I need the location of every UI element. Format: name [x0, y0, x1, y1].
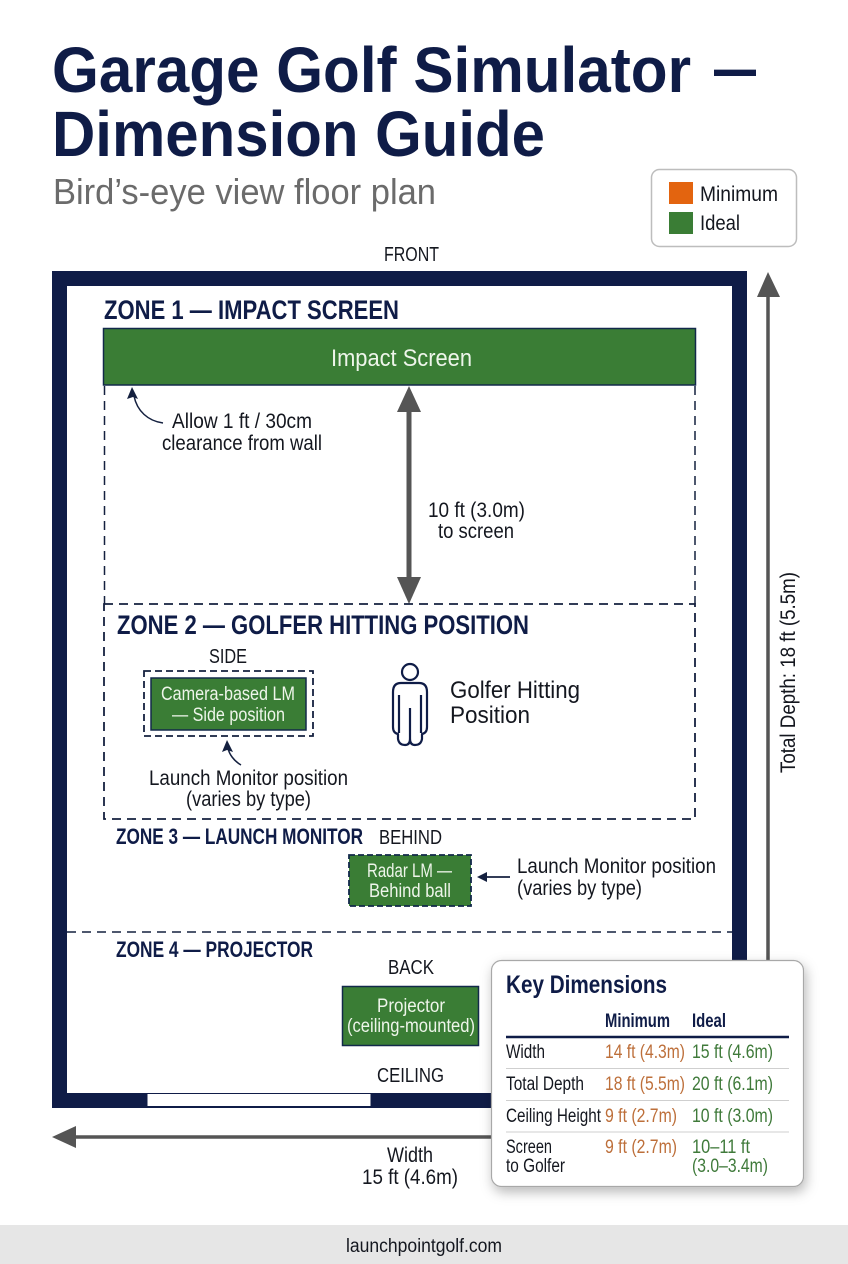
callout: wall clearance [162, 410, 322, 455]
label: behind: BEHIND [379, 827, 442, 849]
row: ceiling height: 10 ft (3.0m) [692, 1106, 773, 1127]
radar launch monitor box: Radar LM — [367, 861, 452, 882]
garage door opening [148, 1094, 370, 1106]
row: total depth: Total Depth [506, 1074, 584, 1095]
legend [652, 170, 796, 246]
callout arrow: wall clearance [127, 387, 163, 423]
title [52, 32, 756, 170]
label: front: FRONT [384, 244, 439, 266]
title: Dimension Guide [52, 98, 545, 170]
arrow: distance to screen [397, 386, 421, 604]
zone 4 heading: ZONE 4 — PROJECTOR [116, 937, 313, 962]
legend label: ideal: Ideal [700, 212, 740, 235]
projector box: Projector [377, 996, 446, 1017]
callout arrow: side position [222, 740, 241, 765]
callout: behind launch monitor position [517, 855, 716, 900]
zone 1 dashed boundary [104, 386, 695, 604]
zone 2 boundary [104, 604, 695, 819]
label: distance to screen [428, 499, 525, 543]
label: golfer hitting position [450, 677, 580, 729]
legend swatch: ideal [669, 212, 693, 234]
label: width: Width [387, 1144, 433, 1167]
projector box: (ceiling-mounted) [347, 1016, 475, 1037]
row: width: Width [506, 1042, 545, 1063]
callout: wall clearance: Allow 1 ft / 30cm [172, 410, 312, 433]
camera launch monitor box: — Side position [172, 705, 285, 726]
callout arrow: radar position [477, 872, 510, 882]
row: ceiling height: 9 ft (2.7m) [605, 1106, 677, 1127]
camera launch monitor box [144, 671, 313, 736]
row: screen to golfer: Screen [506, 1137, 552, 1158]
panel: key dimensions [492, 960, 804, 1186]
row: ceiling height: Ceiling Height [506, 1106, 602, 1127]
label: golfer hitting position: Position [450, 702, 530, 729]
footer [0, 1225, 848, 1264]
callout: side launch monitor position: Launch Monitor position [149, 767, 348, 790]
label: total depth: Total Depth: 18 ft (5.5m) [777, 572, 800, 773]
label: golfer hitting position: Golfer Hitting [450, 677, 580, 704]
callout: side launch monitor position [149, 767, 348, 811]
legend swatch: minimum [669, 182, 693, 204]
icon: golfer [393, 664, 427, 745]
row: width: 15 ft (4.6m) [692, 1042, 773, 1063]
row: screen to golfer: (3.0–3.4m) [692, 1156, 768, 1177]
row: ceiling height [506, 1106, 773, 1127]
arrow: total depth [757, 272, 780, 965]
callout: wall clearance: clearance from wall [162, 432, 322, 455]
legend label: minimum: Minimum [700, 183, 778, 206]
label: back: BACK [388, 957, 435, 979]
title: — [714, 32, 756, 104]
footer: launchpointgolf.com [346, 1236, 502, 1257]
title: Garage Golf Simulator [52, 34, 691, 106]
label: ceiling: CEILING [377, 1065, 444, 1087]
callout: side launch monitor position: (varies by type) [186, 788, 311, 811]
zone 2 heading: ZONE 2 — GOLFER HITTING POSITION [117, 610, 529, 640]
callout: behind launch monitor position: Launch Monitor position [517, 855, 716, 878]
row: screen to golfer: 10–11 ft [692, 1137, 751, 1158]
subtitle: Bird’s-eye view floor plan [53, 171, 436, 212]
row: screen to golfer [506, 1137, 768, 1177]
row: total depth: 18 ft (5.5m) [605, 1074, 685, 1095]
column headers: Ideal [692, 1011, 726, 1032]
row: screen to golfer: to Golfer [506, 1156, 566, 1177]
callout: behind launch monitor position: (varies by type) [517, 877, 642, 900]
row: total depth [506, 1074, 773, 1095]
impact screen [104, 328, 696, 385]
row: width [506, 1042, 773, 1063]
column headers: Minimum [605, 1011, 670, 1032]
radar launch monitor box: Behind ball [369, 881, 451, 902]
zone 1 heading: ZONE 1 — IMPACT SCREEN [104, 295, 399, 325]
row: width: 14 ft (4.3m) [605, 1042, 685, 1063]
row: total depth: 20 ft (6.1m) [692, 1074, 773, 1095]
label: width [362, 1144, 458, 1189]
impact screen: Impact Screen [331, 345, 472, 372]
zone 3/4 divider [67, 931, 732, 933]
garage walls [52, 271, 747, 1108]
projector box [342, 986, 478, 1046]
panel heading: Key Dimensions [506, 971, 667, 999]
label: width: 15 ft (4.6m) [362, 1166, 458, 1189]
column headers [605, 1011, 726, 1032]
radar launch monitor box [349, 855, 471, 906]
label: distance to screen: 10 ft (3.0m) [428, 499, 525, 522]
row: screen to golfer: 9 ft (2.7m) [605, 1137, 677, 1158]
label: side: SIDE [209, 646, 247, 668]
camera launch monitor box: Camera-based LM [161, 684, 295, 705]
label: distance to screen: to screen [438, 520, 514, 543]
zone 3 heading: ZONE 3 — LAUNCH MONITOR [116, 824, 363, 849]
arrow: width [52, 1126, 495, 1148]
